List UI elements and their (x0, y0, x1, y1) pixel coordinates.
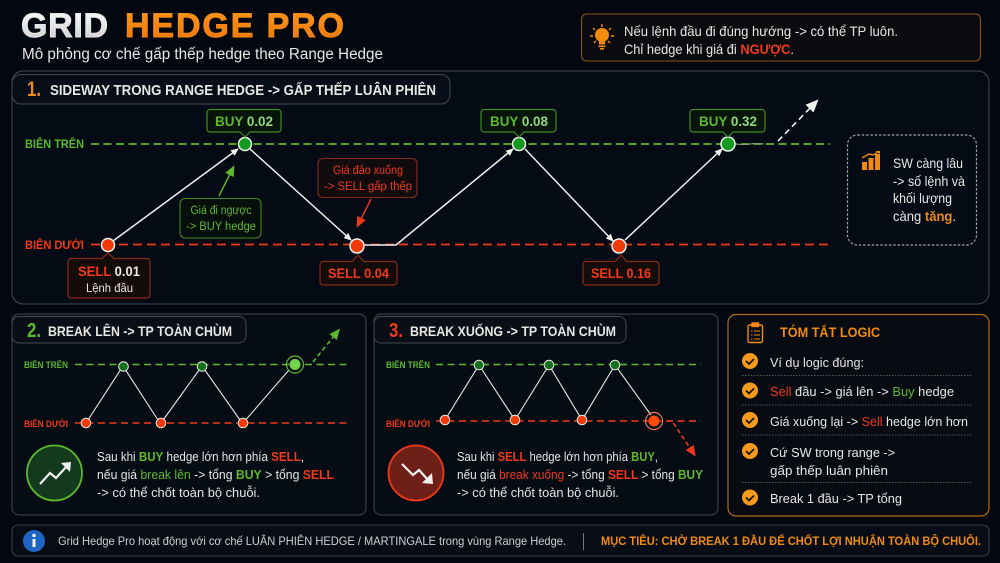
boundary labels and lines: BIÊN TRÊN (386, 359, 430, 371)
boundary labels and lines: BIÊN TRÊN (24, 359, 68, 371)
title: GRID (21, 7, 108, 45)
row 5: Break 1 đầu -> TP tổng (770, 491, 902, 506)
icon: info (23, 530, 45, 552)
heading panel 1: 1. (27, 78, 41, 101)
arrow: buy hedge callout (219, 168, 233, 196)
callout: sell martingale (318, 158, 417, 198)
row 1: Ví dụ logic đúng: (770, 355, 864, 370)
label: BUY 0.08 (481, 110, 556, 137)
price path (445, 365, 651, 420)
explanation text (97, 449, 334, 500)
tip text: Chỉ hedge khi giá đi NGƯỢC. (624, 41, 794, 57)
heading panel 4: TÓM TẮT LOGIC (780, 325, 880, 340)
boundary labels and lines: BIÊN DƯỚI (386, 418, 430, 430)
explanation text: -> có thể chốt toàn bộ chuỗi. (97, 485, 260, 500)
label: SELL 0.01: Lệnh đầu (86, 283, 133, 295)
heading panel 3: 3. (389, 320, 403, 342)
tip text: Nếu lệnh đầu đi đúng hướng -> có thể TP luôn. (624, 23, 898, 39)
label: BUY 0.02 (207, 110, 281, 137)
boundary labels and lines (24, 359, 350, 430)
heading panel 2: BREAK LÊN -> TP TOÀN CHÙM (48, 322, 232, 339)
icon: light bulb (590, 24, 614, 50)
price path (86, 366, 289, 423)
subtitle: Mô phỏng cơ chế gấp thếp hedge theo Range Hedge (22, 46, 383, 63)
callout: buy hedge: -> BUY hedge (186, 221, 256, 233)
tip text (624, 23, 898, 57)
row 1 (742, 353, 864, 370)
label: BUY 0.08: BUY 0.08 (490, 113, 548, 129)
icon: trending up circle (27, 446, 82, 500)
label: BUY 0.02: BUY 0.02 (215, 113, 273, 129)
arrow: breakout dashed (778, 102, 816, 141)
panel 4: logic summary (728, 314, 989, 516)
title: HEDGE PRO (125, 7, 344, 45)
note box: volume increases (848, 135, 976, 245)
icon: trending down circle (388, 446, 444, 500)
nodes (81, 362, 248, 428)
callout: sell martingale: Giá đảo xuống (333, 165, 403, 177)
callout: buy hedge: Giá đi ngược (190, 205, 252, 217)
title (21, 7, 344, 45)
heading panel 1 (12, 74, 450, 104)
icon: clipboard (748, 323, 762, 342)
arrow: break up dashed (313, 331, 338, 362)
explanation text: Sau khi SELL hedge lớn hơn phía BUY, (457, 449, 658, 464)
note text: khối lượng (893, 190, 952, 206)
label: BUY 0.32: BUY 0.32 (699, 113, 757, 129)
boundary labels and lines (386, 359, 701, 430)
footer bar (12, 525, 989, 556)
explanation text: nếu giá break lên -> tổng BUY > tổng SELL (97, 467, 334, 482)
heading panel 3: BREAK XUỐNG -> TP TOÀN CHÙM (410, 322, 616, 339)
note text: càng tăng. (893, 208, 956, 224)
row 2: Sell đầu -> giá lên -> Buy hedge (770, 384, 954, 399)
heading panel 2 (12, 316, 246, 343)
heading panel 2: 2. (27, 320, 41, 342)
breakout node (646, 412, 662, 430)
row 4: Cứ SW trong range -> (770, 445, 895, 460)
footer description: Grid Hedge Pro hoạt động với cơ chế LUÂN PHIÊN HEDGE / MARTINGALE trong vùng Range Hedge. (58, 533, 566, 548)
explanation text (457, 449, 703, 500)
arrow: break down dashed (667, 421, 694, 454)
nodes (102, 137, 735, 253)
explanation text: -> có thể chốt toàn bộ chuỗi. (457, 485, 619, 500)
callout: sell martingale: -> SELL gấp thếp (324, 181, 412, 193)
panel 2: break up (12, 314, 366, 515)
row 4: gấp thếp luân phiên (770, 463, 888, 478)
row 3: Giá xuống lại -> Sell hedge lớn hơn (770, 414, 968, 429)
label: SELL 0.04 (320, 255, 397, 285)
note text: SW càng lâu (893, 155, 963, 171)
icon: rising bars (862, 151, 880, 170)
label: BUY 0.32 (690, 110, 765, 137)
row 4 (742, 443, 895, 478)
arrow: sell callout (358, 199, 371, 225)
label: SELL 0.16 (583, 255, 659, 285)
label: SELL 0.01: SELL 0.01 (78, 263, 140, 279)
note text (893, 155, 965, 224)
note text: -> số lệnh và (893, 173, 965, 189)
upper boundary line and label: BIÊN TRÊN (25, 138, 84, 151)
heading panel 1: SIDEWAY TRONG RANGE HEDGE -> GẤP THẾP LUÂN PHIÊN (50, 81, 436, 99)
explanation text: nếu giá break xuống -> tổng SELL > tổng BUY (457, 467, 703, 482)
callout: buy hedge (180, 198, 261, 238)
nodes (440, 360, 620, 425)
callout: tip box (582, 14, 980, 61)
label: SELL 0.04: SELL 0.04 (328, 265, 389, 281)
panel 3: break down (374, 314, 718, 515)
label: SELL 0.16: SELL 0.16 (591, 265, 651, 281)
explanation text: Sau khi BUY hedge lớn hơn phía SELL, (97, 449, 304, 464)
lower boundary line and label: BIÊN DƯỚI (25, 239, 84, 252)
price path (113, 144, 764, 245)
footer goal: MỤC TIÊU: CHỜ BREAK 1 ĐẦU ĐỂ CHỐT LỢI NHUẬN TOÀN BỘ CHUỖI. (601, 533, 981, 548)
boundary labels and lines: BIÊN DƯỚI (24, 418, 68, 430)
breakout node (286, 356, 304, 373)
label: SELL 0.01 (68, 253, 150, 298)
panel 1: sideway in range hedge (12, 71, 989, 304)
heading panel 3 (374, 316, 626, 343)
